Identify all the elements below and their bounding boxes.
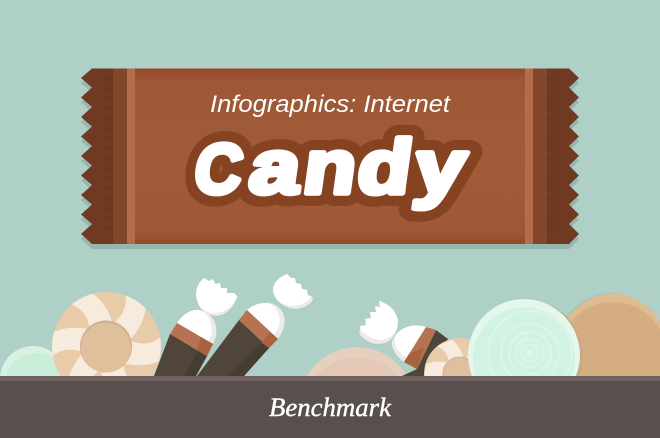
head xyxy=(247,303,285,339)
candy: mint round xyxy=(468,299,583,412)
candy: swirl large xyxy=(52,292,161,376)
title outline: a xyxy=(245,125,307,210)
crimp marks left xyxy=(100,76,113,231)
title outline xyxy=(190,125,472,210)
body xyxy=(197,320,269,376)
band xyxy=(170,323,213,356)
bar body xyxy=(135,68,525,244)
tail xyxy=(273,274,313,309)
title: a xyxy=(245,125,307,210)
title outline: d xyxy=(353,125,418,210)
bar wrapper ends xyxy=(81,68,579,244)
title: n xyxy=(299,125,363,210)
candy: tan round xyxy=(566,293,660,376)
candy: wrapped middle right xyxy=(197,268,315,376)
body shade xyxy=(228,343,269,376)
head xyxy=(392,325,426,362)
bar shadow xyxy=(81,73,579,249)
band xyxy=(404,327,436,369)
title outline: C xyxy=(190,129,248,208)
candy bar xyxy=(81,68,579,249)
title: y xyxy=(410,125,472,210)
tail xyxy=(359,301,398,344)
title outline: n xyxy=(299,125,363,210)
head xyxy=(177,310,216,344)
body shade xyxy=(184,351,207,376)
tail xyxy=(196,278,238,316)
left stripes xyxy=(113,68,127,244)
candy: wrapped middle left xyxy=(154,272,240,376)
body xyxy=(154,334,207,376)
candy: swirl small xyxy=(424,338,472,376)
band xyxy=(239,310,278,348)
title: d xyxy=(353,125,418,210)
right stripes xyxy=(525,68,533,244)
footer bar xyxy=(0,376,660,438)
candy: left mint xyxy=(0,346,60,376)
crimp marks right xyxy=(547,76,560,231)
candy: pink round xyxy=(306,347,408,378)
title xyxy=(190,125,472,210)
candy: wrapped right xyxy=(355,296,448,376)
body xyxy=(402,330,448,376)
title: C xyxy=(190,129,248,208)
logo: Benchmark xyxy=(269,393,391,422)
subtitle: Infographics: Internet xyxy=(210,91,451,118)
title outline: y xyxy=(410,125,472,210)
